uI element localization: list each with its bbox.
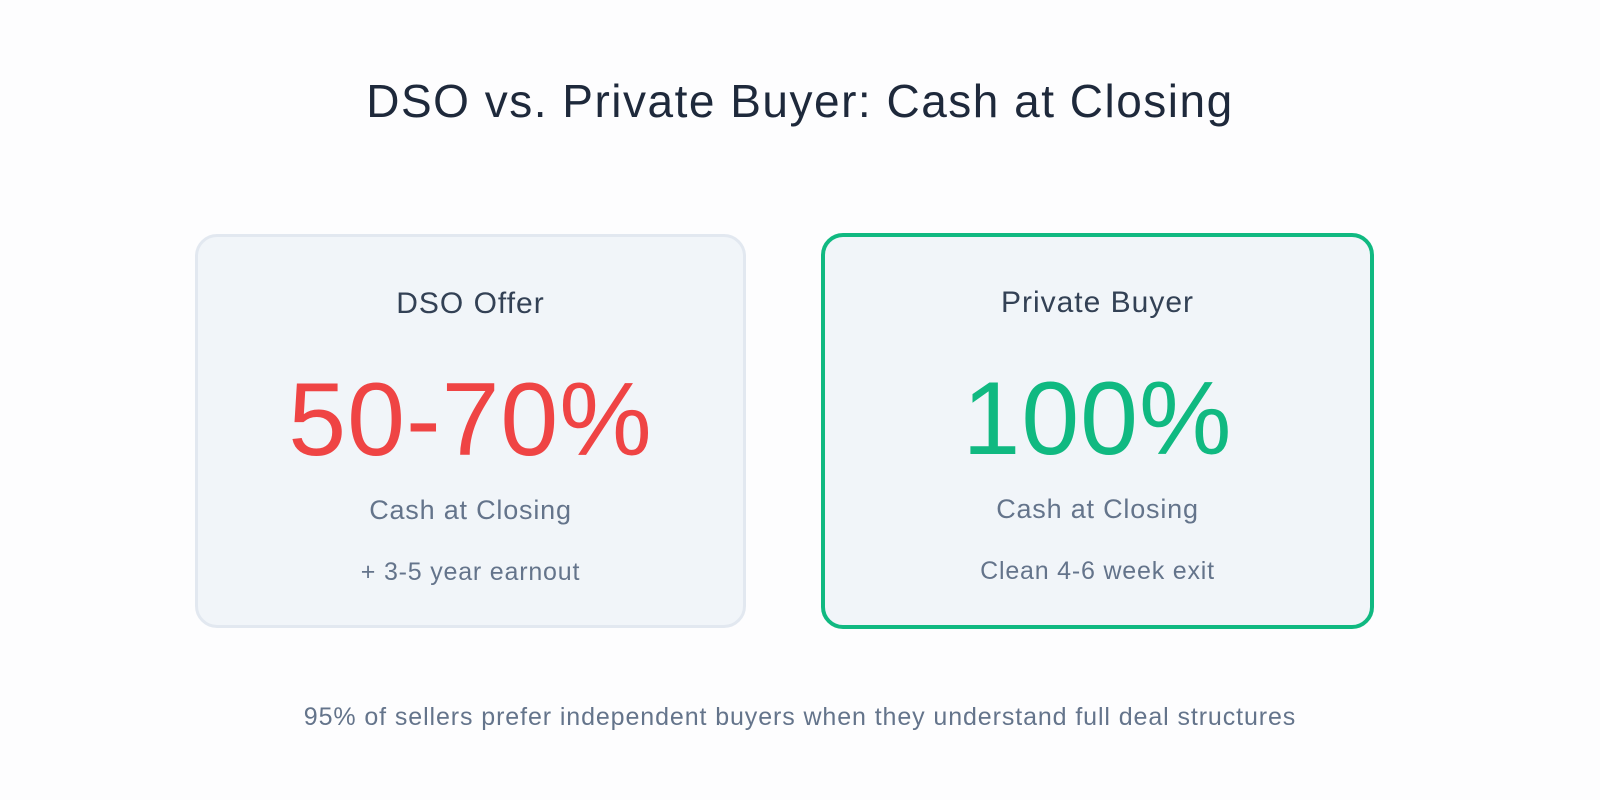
title: DSO vs. Private Buyer: Cash at Closing (366, 75, 1234, 127)
big number: 100%: 100% (962, 361, 1232, 477)
panel: DSO offer (195, 234, 746, 628)
note: clean exit: Clean 4-6 week exit (980, 557, 1215, 585)
note: earnout: + 3-5 year earnout (361, 558, 580, 586)
heading: Private Buyer: Private Buyer (1001, 286, 1194, 319)
label: cash at closing: Cash at Closing (369, 495, 572, 525)
big number: 50-70%: 50-70% (288, 362, 653, 478)
label: cash at closing: Cash at Closing (996, 494, 1199, 524)
footer note: 95% of sellers prefer independent buyers when they understand full deal structures (304, 703, 1296, 731)
heading: DSO Offer: DSO Offer (396, 287, 545, 320)
panel: private buyer (821, 233, 1374, 629)
